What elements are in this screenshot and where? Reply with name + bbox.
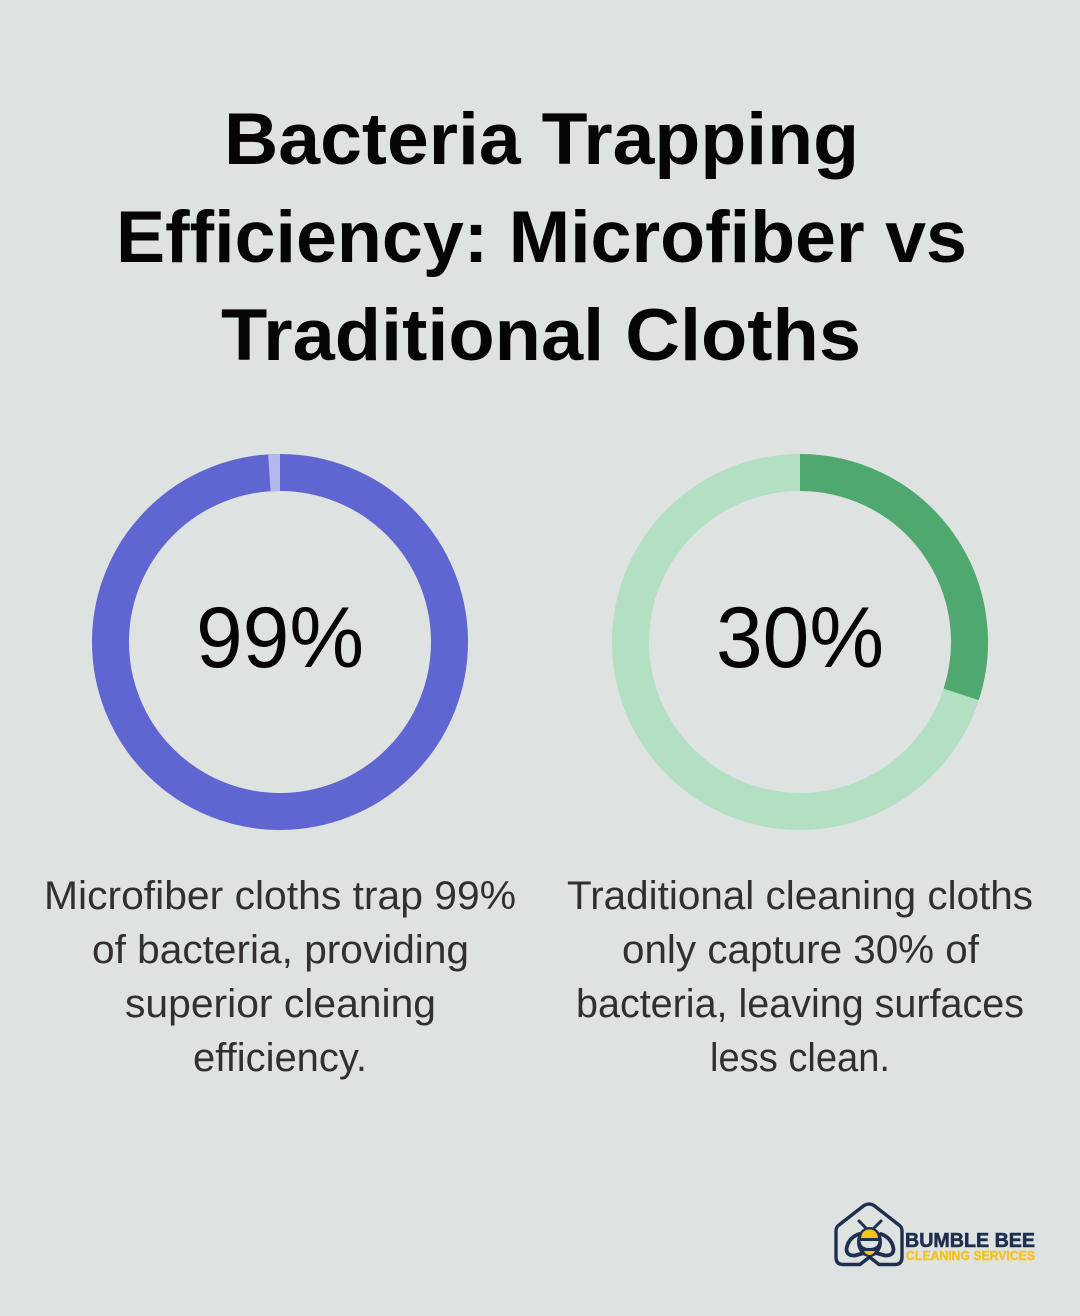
text block: traditional description: Traditional cleaning cloths [567, 874, 1033, 918]
icon: house with bee [836, 1204, 902, 1264]
title: Efficiency: Microfiber vs [116, 197, 967, 278]
logo text: company name: BUMBLE BEE [905, 1230, 1035, 1252]
text block: traditional description: less clean. [710, 1036, 890, 1080]
donut chart: microfiber 99% [110, 472, 450, 812]
donut chart: traditional 30%: 30% [716, 590, 884, 686]
text block: microfiber description: superior cleaning [125, 982, 436, 1026]
text block: microfiber description [44, 874, 516, 1080]
text block: microfiber description: of bacteria, providing [92, 928, 469, 972]
title [116, 99, 967, 376]
text block: microfiber description: Microfiber cloths trap 99% [44, 874, 516, 918]
title: Traditional Cloths [221, 295, 861, 376]
text block: traditional description: bacteria, leaving surfaces [576, 982, 1024, 1026]
text block: traditional description: only capture 30% of [622, 928, 980, 972]
text block: traditional description [567, 874, 1033, 1080]
donut chart: microfiber 99%: 99% [196, 590, 364, 686]
logo: Bumble Bee Cleaning Services [836, 1204, 1035, 1264]
donut chart: traditional 30% [630, 472, 970, 812]
title: Bacteria Trapping [224, 99, 859, 180]
logo text: tagline: CLEANING SERVICES [906, 1249, 1035, 1263]
text block: microfiber description: efficiency. [193, 1036, 367, 1080]
